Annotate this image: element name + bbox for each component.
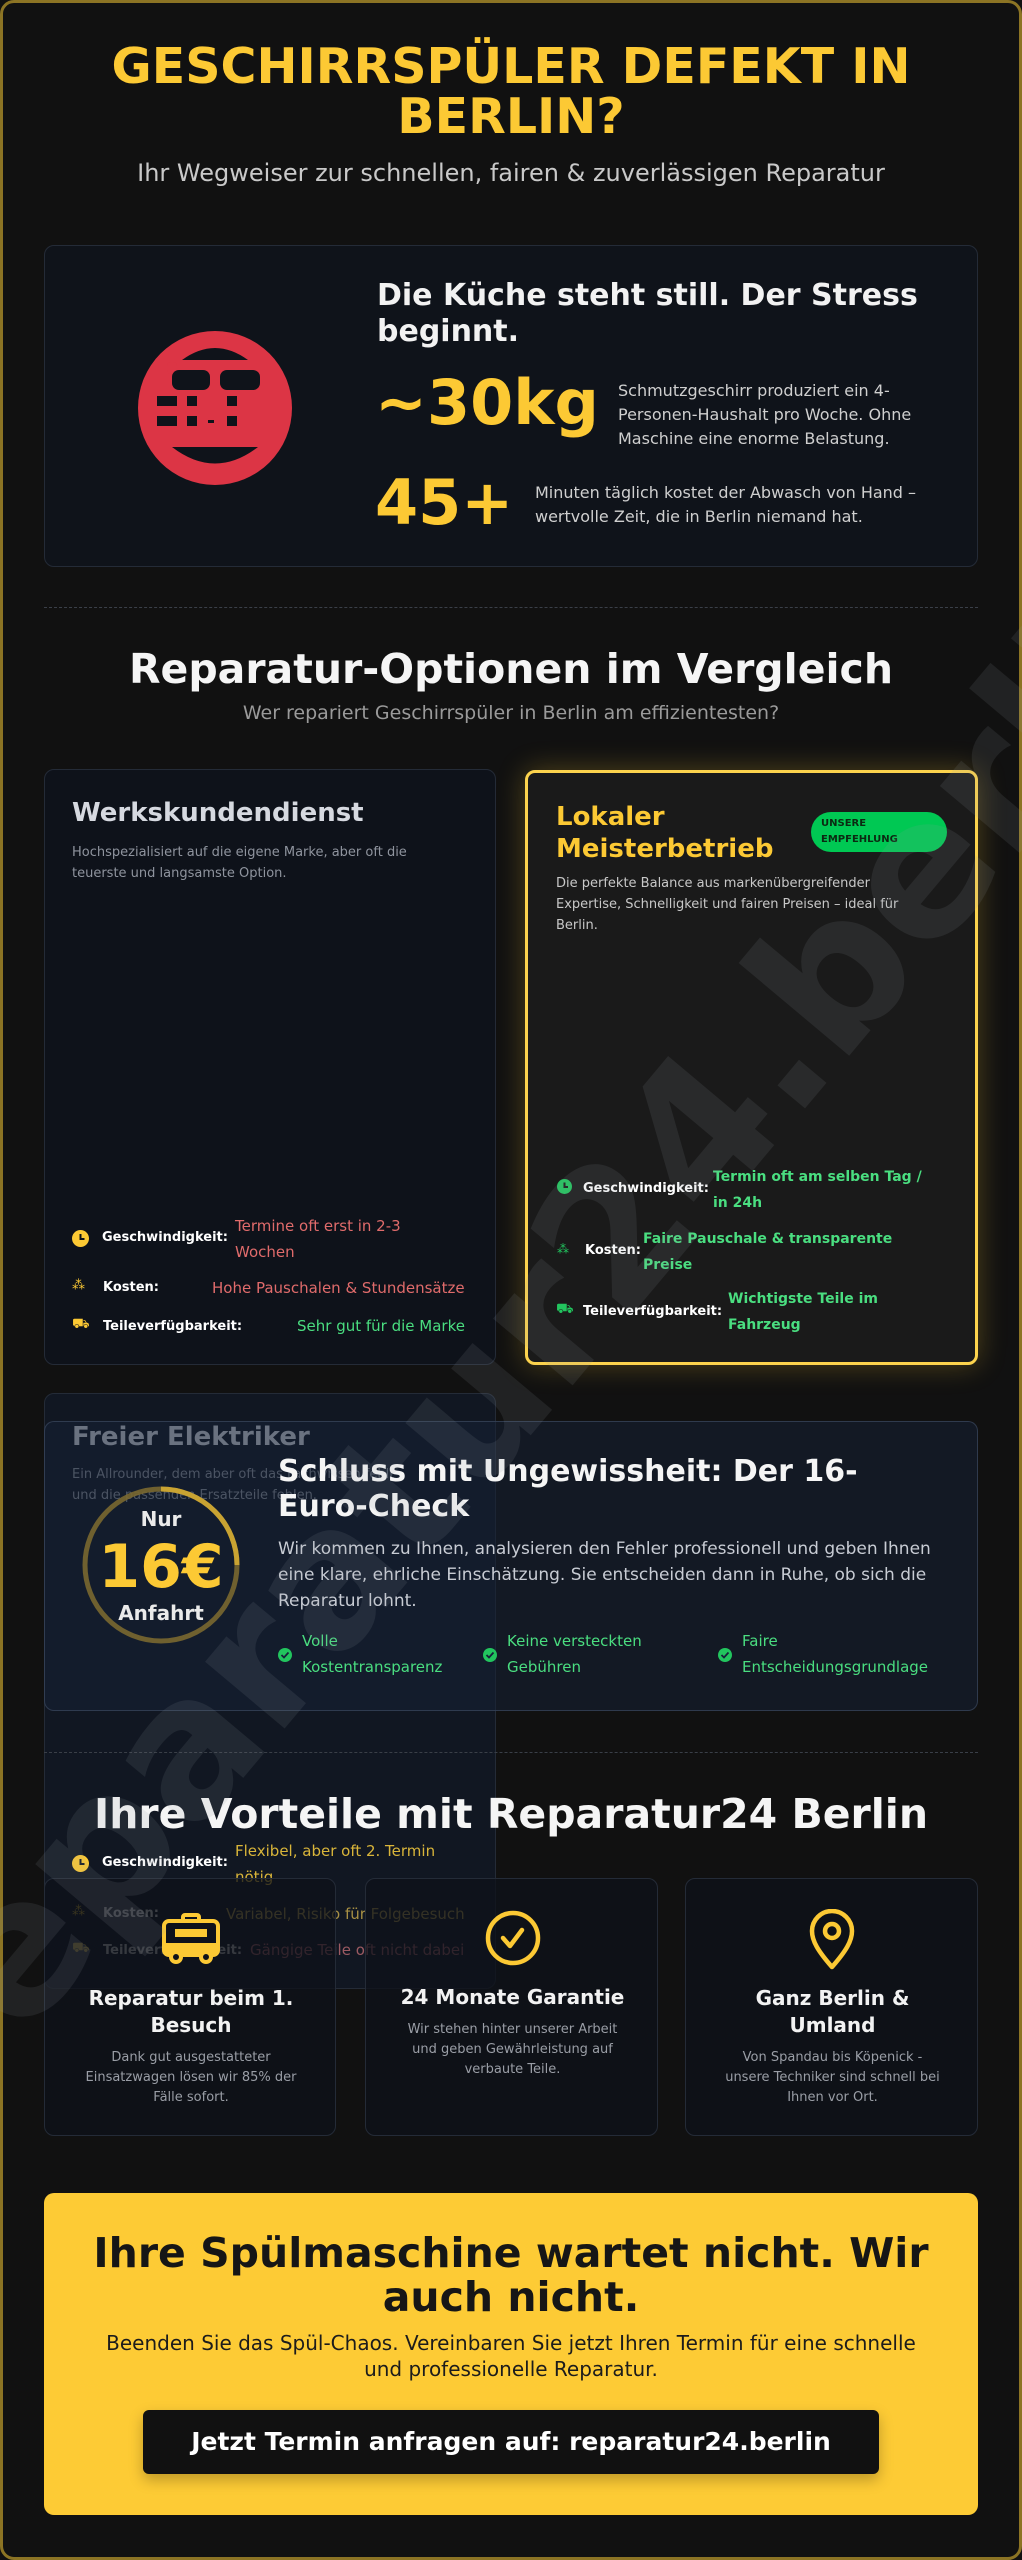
feature: parts: ⛟ [556,1301,574,1317]
heading: stress: beginnt. [377,314,519,349]
text: Lokaler description [556,876,898,933]
check: Kostentransparenz: Kostentransparenz [302,1658,442,1676]
feature: cost: ⁂ [557,1242,569,1256]
feature: cost: ⁂ [72,1904,85,1919]
heading: CTA: Ihre Spülmaschine wartet nicht. Wir [93,2229,929,2277]
feature: parts [556,1291,878,1333]
feature: speed: Geschwindigkeit: [102,1230,228,1245]
heading: stress: Die Küche steht still. Der Stress [377,278,918,313]
feature: cost [72,1278,465,1297]
feature: speed: nötig [235,1868,273,1886]
text [725,2050,940,2105]
feature: parts [72,1316,465,1335]
text: 30kg description: Schmutzgeschirr produziert ein 4- [618,381,890,400]
heading: Lokaler Meisterbetrieb: Meisterbetrieb [556,834,773,864]
badge: recommendation [811,812,947,852]
text: Einsatzwagen lösen wir 85% der [86,2070,296,2085]
text: Lokaler description: Die perfekte Balance aus markenübergreifender [556,876,870,891]
check: Gebühren: Keine versteckten [507,1632,642,1650]
check: Gebühren: Gebühren [507,1658,581,1676]
feature: cost: ⁂ [72,1278,85,1293]
heading: 16-Euro-Check: Schluss mit Ungewissheit: Der 16- [278,1454,858,1489]
text: und geben Gewährleistung auf [412,2042,613,2057]
heading: CTA: auch nicht. [383,2273,639,2321]
heading: stress [377,278,918,349]
feature: speed [72,1842,435,1886]
icon: map pin [810,1909,854,1970]
badge: 16€ circle: Nur [141,1507,181,1531]
text: unsere Techniker sind schnell bei [725,2070,940,2085]
feature: cost: Preise [643,1257,692,1273]
feature: parts: ⛟ [72,1316,90,1332]
title: Besuch [150,2013,232,2037]
feature: parts: Sehr gut für die Marke [297,1317,465,1335]
check: Kostentransparenz [278,1632,442,1676]
check: Kostentransparenz: Volle [302,1632,338,1650]
checklist [278,1632,928,1676]
panel: Lokaler Meisterbetrieb [525,770,978,1365]
text: Werks description [72,845,407,881]
text: Freier description: Ein Allrounder, dem aber oft das Fachwissen fehlt [72,1467,394,1482]
title: BERLIN? [397,88,625,145]
feature: cost [557,1231,892,1273]
heading: comparison: Reparatur-Optionen im Vergleich [129,645,893,693]
heading: Vorteile: Ihre Vorteile mit Reparatur24 Berlin [94,1790,928,1838]
panel: stress [44,245,978,567]
heading: Werkskundendienst: Werkskundendienst [72,798,364,828]
heading: 16-Euro-Check: Euro-Check [278,1489,469,1524]
feature: speed [72,1217,401,1261]
text: 30kg description [618,381,911,448]
feature: parts: Fahrzeug [728,1317,801,1333]
feature: speed: Termin oft am selben Tag / [713,1169,922,1185]
text: Lokaler description: Expertise, Schnelligkeit und fairen Preisen – ideal für [556,897,898,912]
text: CTA: und professionelle Reparatur. [364,2357,658,2381]
card: Ganz Berlin [685,1878,978,2136]
title [89,1986,293,2037]
feature: speed: Geschwindigkeit: [102,1855,228,1870]
panel: Werkskundendienst [44,769,496,1365]
feature: parts: Teileverfügbarkeit: [103,1943,242,1958]
check: Entscheidungsgrundlage: Entscheidungsgrundlage [742,1658,928,1676]
panel: 16-Euro-Check [44,1421,978,1711]
text: 30kg description: Personen-Haushalt pro Woche. Ohne [618,405,911,424]
feature: cost: Kosten: [103,1906,159,1921]
text: 30kg description: Maschine eine enorme Belastung. [618,429,890,448]
title [112,37,910,145]
subheading: comparison: Wer repariert Geschirrspüler in Berlin am effizientesten? [243,702,779,724]
feature: cost: Hohe Pauschalen & Stundensätze [212,1279,465,1297]
text: 45+ description [535,483,916,526]
title: Ganz Berlin & [756,1986,909,2010]
text: 45+ description: Minuten täglich kostet der Abwasch von Hand – [535,483,916,502]
heading: Lokaler Meisterbetrieb: Lokaler [556,802,665,832]
icon: broken dishwasher [138,331,292,485]
feature: parts [72,1940,464,1959]
text: check description: eine klare, ehrliche Einschätzung. Sie entscheiden dann in Ruhe, ob sich die [278,1565,926,1585]
text: CTA: Beenden Sie das Spül-Chaos. Vereinbaren Sie jetzt Ihren Termin für eine schnelle [106,2331,916,2355]
title: 24 Monate Garantie [401,1985,624,2009]
feature: cost: Faire Pauschale & transparente [643,1231,892,1247]
text: Werks description: Hochspezialisiert auf die eigene Marke, aber oft die [72,845,407,860]
panel: Freier Elektriker [44,1393,496,1989]
text: check description [278,1539,931,1611]
text: Von Spandau bis Köpenick - [743,2050,922,2065]
check: Entscheidungsgrundlage: Faire [742,1632,778,1650]
text: Freier description [72,1467,394,1503]
heading: Freier Elektriker: Freier Elektriker [72,1422,310,1452]
card: Garantie [365,1878,658,2136]
text [408,2022,618,2077]
stat: 30kg: ~30kg [375,366,599,439]
text: check description: Reparatur lohnt. [278,1591,417,1611]
feature: speed: Flexibel, aber oft 2. Termin [235,1842,435,1860]
feature: speed: Termine oft erst in 2-3 [235,1217,401,1235]
feature: parts: Teileverfügbarkeit: [103,1319,242,1334]
stat: 45+: 45+ [375,466,513,539]
card: Reparatur beim 1. Besuch [44,1878,336,2136]
text: Fälle sofort. [153,2090,229,2105]
feature: cost: Kosten: [585,1243,641,1258]
feature: parts: Teileverfügbarkeit: [583,1304,722,1319]
text: Wir stehen hinter unserer Arbeit [408,2022,617,2037]
badge: 16€ circle: Anfahrt [118,1601,204,1625]
feature: speed: Wochen [235,1243,295,1261]
feature: cost [72,1904,465,1923]
heading: 16-Euro-Check [278,1454,858,1524]
check: Gebühren [483,1632,642,1676]
subtitle: Ihr Wegweiser zur schnellen, fairen & zuverlässigen Reparatur [137,159,885,187]
badge: recommendation: UNSERE [821,818,866,829]
text: Ihnen vor Ort. [787,2090,878,2105]
badge: 16€ circle: 16€ [98,1532,224,1602]
icon: check circle [486,1910,540,1966]
title [756,1986,909,2037]
text: Dank gut ausgestatteter [111,2050,271,2065]
button: CTA [143,2410,879,2474]
feature: cost: Variabel, Risiko für Folgebesuch [226,1905,465,1923]
text: Lokaler description: Berlin. [556,918,598,933]
check: Entscheidungsgrundlage [718,1632,928,1676]
text: Werks description: teuerste und langsamste Option. [72,866,287,881]
title: Reparatur beim 1. [89,1986,293,2010]
CTA panel [44,2193,978,2515]
icon: van [162,1913,220,1964]
title: GESCHIRRSPÜLER DEFEKT IN [112,38,910,95]
text: Freier description: und die passenden Ersatzteile fehlen. [72,1488,317,1503]
text: 45+ description: wertvolle Zeit, die in Berlin niemand hat. [535,507,863,526]
feature: speed: in 24h [713,1195,762,1211]
feature: parts: Wichtigste Teile im [728,1291,878,1307]
text: verbaute Teile. [465,2062,560,2077]
heading: Lokaler Meisterbetrieb [556,802,773,864]
text: CTA [106,2331,916,2381]
feature: speed [557,1169,922,1211]
badge: recommendation: EMPFEHLUNG [821,834,898,845]
button: CTA: Jetzt Termin anfragen auf: reparatur24.berlin [191,2427,831,2456]
title: Umland [790,2013,876,2037]
feature: parts: ⛟ [72,1940,90,1956]
feature: speed: Geschwindigkeit: [583,1181,709,1196]
heading: CTA [93,2229,929,2321]
badge: 16€ circle [82,1486,240,1644]
feature: cost: Kosten: [103,1280,159,1295]
text [86,2050,296,2105]
feature: parts: Gängige Teile oft nicht dabei [250,1941,464,1959]
text: check description: Wir kommen zu Ihnen, analysieren den Fehler professionell und geben Ihnen [278,1539,931,1559]
